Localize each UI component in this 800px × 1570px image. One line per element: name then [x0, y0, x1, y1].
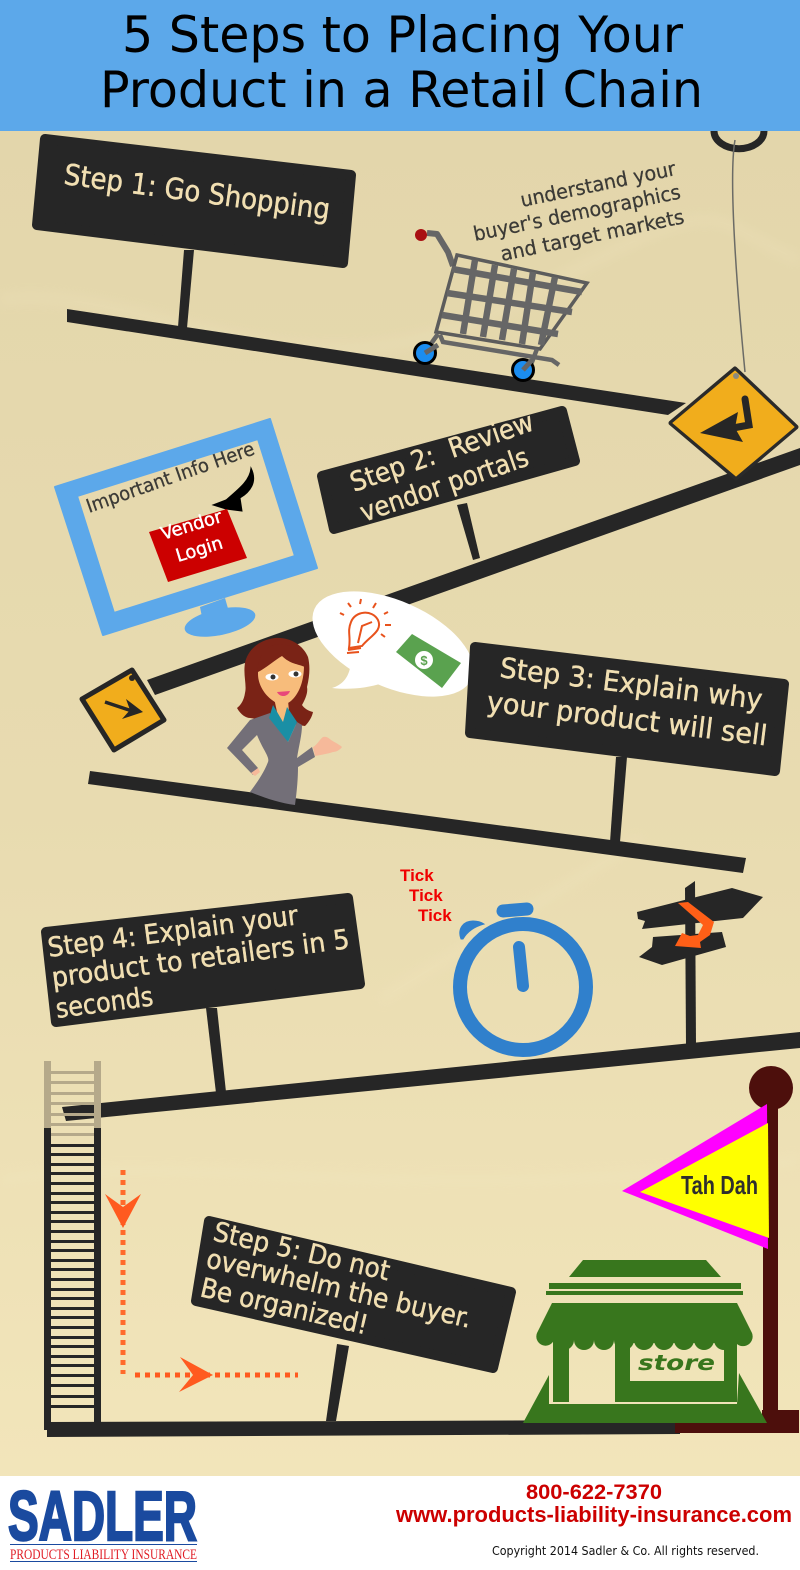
icon: computer monitor — [55, 419, 317, 642]
note: understand your buyer's demographics — [471, 156, 686, 266]
step 4 sign: product to retailers in 5 — [50, 924, 351, 994]
title banner: 5 Steps to Placing Your — [122, 6, 683, 64]
logo: Sadler: SADLER — [8, 1477, 197, 1555]
contact phone: 800-622-7370 — [526, 1481, 662, 1504]
tick tick tick text — [400, 866, 452, 925]
step 5 sign — [196, 1217, 511, 1421]
step 4 sign: Step 4: Explain your — [46, 900, 300, 964]
icon: signpost with orange arrow — [637, 881, 763, 1045]
orange dotted path with arrowheads — [105, 1170, 298, 1392]
step 1 sign — [37, 139, 351, 328]
speech bubble — [297, 570, 489, 718]
collar — [269, 705, 297, 742]
step 2 sign: vendor portals — [356, 442, 533, 529]
logo: Sadler — [8, 1477, 197, 1563]
vendor login button: Vendor — [158, 506, 225, 545]
step 5 sign: overwhelm the buyer. — [203, 1244, 474, 1335]
note: understand your buyer's demographics: understand your — [518, 156, 678, 212]
icon: banknotes: $ — [420, 653, 428, 668]
step 3 sign — [470, 647, 784, 842]
step 3 sign: your product will sell — [485, 685, 769, 752]
icon: green store — [523, 1260, 767, 1423]
tick tick tick text: Tick — [400, 866, 434, 885]
icon: light bulb — [340, 599, 391, 653]
step 1 sign: Step 1: Go Shopping — [62, 157, 332, 226]
step 4 sign — [46, 898, 360, 1093]
step 5 sign: Step 5: Do not — [210, 1217, 393, 1287]
icon: computer monitor: Important Info Here — [83, 438, 258, 518]
beam: ground — [47, 1420, 680, 1437]
vendor login button — [149, 506, 247, 582]
icon: stopwatch — [460, 909, 586, 1050]
title banner: Product in a Retail Chain — [100, 61, 703, 119]
step 5 sign: Be organized! — [197, 1273, 371, 1341]
pennant flag: Tah Dah — [681, 1170, 758, 1200]
beam: ramp 4 — [62, 1032, 800, 1121]
note: understand your buyer's demographics: and target markets — [498, 204, 686, 266]
head — [258, 653, 304, 704]
beam: ramp 1 — [67, 309, 686, 415]
step 2 sign — [322, 407, 575, 560]
beam: ramp 2 — [147, 448, 800, 695]
logo: Sadler: PRODUCTS LIABILITY INSURANCE — [10, 1547, 197, 1563]
step 3 sign: Step 3: Explain why — [498, 651, 764, 716]
icon: banknotes — [396, 634, 461, 688]
illustration: businesswoman — [227, 638, 342, 805]
icon: green store: store — [638, 1351, 715, 1375]
hands — [251, 737, 342, 776]
tick tick tick text: Tick — [418, 906, 452, 925]
icon: shopping cart — [414, 229, 587, 380]
pennant flag — [622, 1104, 769, 1249]
title banner — [0, 0, 800, 131]
vendor login button: Login — [173, 533, 225, 567]
step 4 sign: seconds — [54, 981, 155, 1025]
icon: small yellow sign — [82, 670, 164, 750]
footer — [0, 1476, 800, 1570]
icon: large yellow diamond sign — [671, 369, 796, 478]
beam: ramp 3 — [88, 771, 746, 873]
tick tick tick text: Tick — [409, 886, 443, 905]
contact website: www.products-liability-insurance.com — [395, 1502, 792, 1527]
icon: black curved arrow — [213, 468, 254, 511]
icon: ladder — [44, 1061, 101, 1430]
note: understand your buyer's demographics: buyer's demographics — [471, 180, 683, 246]
hanging ring and wire — [714, 131, 764, 372]
icon: flag pole — [622, 1066, 799, 1433]
step 2 sign: Step 2: Review — [346, 407, 538, 499]
copyright: Copyright 2014 Sadler & Co. All rights reserved. — [492, 1544, 759, 1558]
suit jacket — [227, 713, 315, 805]
